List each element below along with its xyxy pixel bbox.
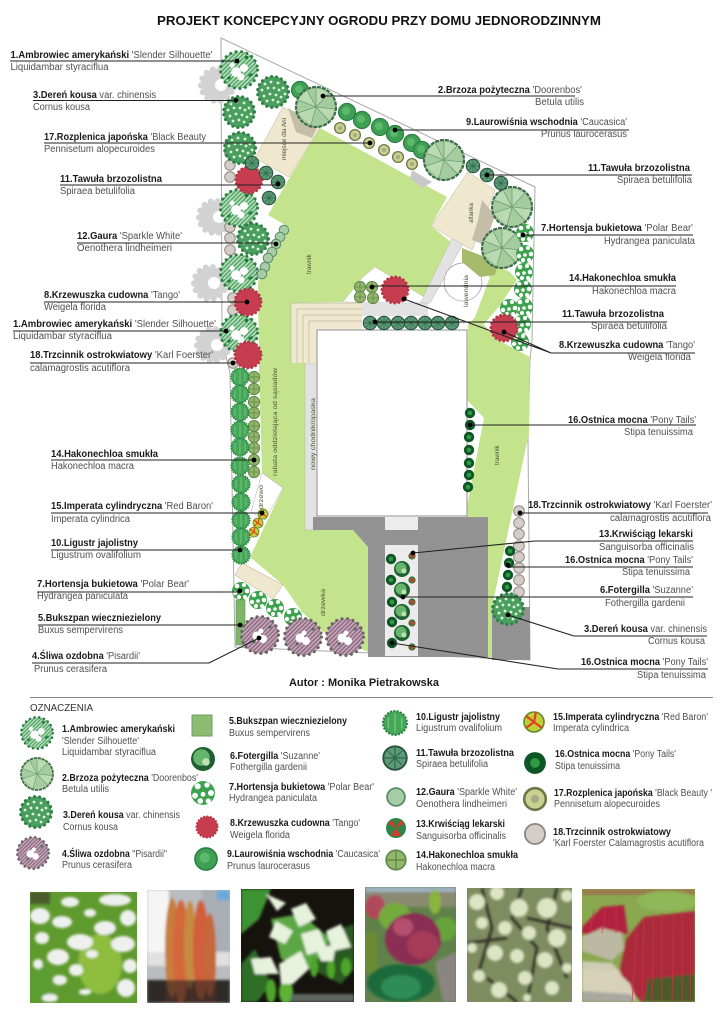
drive right segment	[492, 607, 530, 660]
plants: krzewuszka	[235, 167, 517, 368]
callout: 6 Fotergilla: 6.Fotergilla 'Suzanne'	[600, 585, 693, 596]
plot outline	[221, 38, 535, 660]
plants: imperata	[249, 509, 268, 537]
terrace	[291, 303, 362, 363]
callout: 7 Hortensja: Hydrangea paniculata	[37, 591, 128, 602]
callout: 10 Ligustr	[51, 538, 242, 561]
photo: white flowering viburnum	[30, 892, 137, 1003]
legend 14	[386, 850, 518, 873]
legend 1: 'Slender Silhouette'	[62, 736, 139, 747]
tree clearing	[251, 473, 283, 520]
legend 14: 14.Hakonechloa smukła	[416, 850, 518, 861]
plan annotations: miejsce dla Ani	[281, 118, 288, 160]
legend 5	[192, 715, 347, 739]
legend 6	[191, 747, 320, 773]
author: Autor : Monika Pietrakowska	[289, 677, 440, 689]
callout: 16 Ostnica	[390, 641, 708, 681]
legend 11: Spiraea betulifolia	[416, 759, 488, 770]
driveway	[313, 517, 488, 657]
legend 3: Cornus kousa	[63, 822, 118, 833]
callout: 1 Ambrowiec	[10, 50, 239, 73]
legend 8: Weigela florida	[230, 830, 290, 841]
right lawn	[465, 325, 530, 657]
callout: 8 Krzewuszka	[402, 297, 695, 363]
callout: 13 Krwisciag: Sanguisorba officinalis	[599, 542, 694, 553]
upper right lawn strip	[462, 248, 517, 325]
legend 1	[21, 717, 175, 758]
callout: 3 Deren: 3.Dereń kousa var. chinensis	[584, 624, 707, 635]
plan annotations: drzewka	[320, 588, 327, 616]
callout: 14 Hakonechloa: 14.Hakonechloa smukła	[51, 449, 158, 460]
legend 13: 13.Krwiściąg lekarski	[416, 819, 505, 830]
legend 17: Pennisetum alopecuroides	[554, 799, 660, 810]
legend 15: 15.Imperata cylindryczna 'Red Baron'	[553, 712, 708, 723]
callout: 2 Brzoza	[321, 85, 584, 108]
plan annotations: altanka	[468, 202, 475, 223]
pavilion miejsce dla Ani	[255, 107, 320, 177]
callout: 16 Ostnica	[506, 555, 693, 578]
callout: 6 Fotergilla	[401, 585, 693, 609]
legend 16: 16.Ostnica mocna 'Pony Tails'	[555, 749, 676, 760]
callout: 15 Imperata: 15.Imperata cylindryczna 'Red Baron'	[51, 501, 213, 512]
callout: 1 Ambrowiec second: 1.Ambrowiec amerykański 'Slender Silhouette'	[13, 319, 216, 330]
callout: 16 Ostnica: 16.Ostnica mocna 'Pony Tails'	[565, 555, 693, 566]
title: PROJEKT KONCEPCYJNY OGRODU PRZY DOMU JEDNORODZINNYM	[157, 13, 601, 28]
legend 6: Fothergilla gardenii	[230, 762, 307, 773]
legend 7	[191, 781, 374, 805]
plants: sliwa	[242, 616, 364, 656]
callout: 11 Tawula	[373, 309, 667, 332]
callout: 11 Tawula: Spiraea betulifolia	[591, 321, 667, 332]
plants: ambrowiec	[220, 52, 258, 352]
plants: hortensja	[232, 224, 534, 626]
legend 13: Sanguisorba officinalis	[416, 831, 506, 842]
legend 4: Prunus cerasifera	[62, 860, 132, 871]
plants: bukszpan	[236, 600, 245, 645]
legend 12: 12.Gaura 'Sparkle White'	[416, 787, 517, 798]
house	[317, 330, 467, 516]
legend 15	[524, 712, 708, 734]
plan annotations: nowy chodnik/opaska	[310, 397, 317, 470]
callout: 5 Bukszpan: 5.Bukszpan wieczniezielony	[38, 613, 161, 624]
callout: 14 Hakonechloa: 14.Hakonechloa smukła	[569, 273, 676, 284]
callout: 9 Laurowisnia	[393, 117, 629, 140]
callout: 1 Ambrowiec second: Liquidambar styraciflua	[13, 331, 112, 342]
plants: tawula	[245, 156, 508, 330]
callout: 4 Sliwa: Prunus cerasifera	[34, 664, 107, 675]
callout: 11 Tawula top: 11.Tawuła brzozolistna	[588, 163, 690, 174]
callouts: left column	[10, 50, 372, 675]
bench	[235, 563, 283, 599]
callout: 10 Ligustr: 10.Ligustr jajolistny	[51, 538, 138, 549]
callout: 17 Rozplenica: 17.Rozplenica japońska 'Black Beauty	[44, 132, 206, 143]
plants: gaura	[257, 225, 289, 279]
callout: 18 Trzcinnik	[518, 500, 712, 524]
legend 5: 5.Bukszpan wieczniezielony	[229, 716, 347, 727]
callout: 8 Krzewuszka: Weigela florida	[44, 302, 106, 313]
divider	[30, 696, 713, 698]
callout: 9 Laurowisnia: Prunus laurocerasus	[541, 129, 627, 140]
photo: tall orange columnar trees	[147, 890, 230, 1003]
callout: 16 Ostnica: Stipa tenuissima	[622, 567, 690, 578]
callout: 1 Ambrowiec: 1.Ambrowiec amerykański 'Slender Silhouette'	[10, 50, 213, 61]
plan annotations: drzewo	[258, 484, 265, 509]
plants: fotergilla	[394, 561, 410, 641]
legend 9: Prunus laurocerasus	[227, 861, 310, 872]
light rectangle	[385, 517, 418, 530]
plants: laurowisnia	[292, 82, 430, 158]
legend 15: Imperata cylindrica	[553, 723, 629, 734]
callout: 11 Tawula: 11.Tawuła brzozolistna	[60, 174, 162, 185]
legend 10	[383, 711, 502, 735]
callout: 12 Gaura: 12.Gaura 'Sparkle White'	[77, 231, 182, 242]
legend 18: 'Karl Foerster Calamagrostis acutiflora	[553, 838, 704, 849]
callout: 2 Brzoza: 2.Brzoza pożyteczna 'Doorenbos'	[438, 85, 582, 96]
planting bed under terrace	[343, 267, 424, 303]
callout: 3 Deren: Cornus kousa	[648, 636, 705, 647]
legend heading: OZNACZENIA	[30, 702, 93, 714]
plants: hakonechloa	[248, 281, 379, 478]
plants: trzcinnik	[225, 148, 524, 597]
callout: 9 Laurowisnia: 9.Laurowiśnia wschodnia 'Caucasica'	[466, 117, 627, 128]
callout: 16 Ostnica	[468, 415, 696, 438]
legend 2: Betula utilis	[62, 784, 109, 795]
callout: 15 Imperata	[51, 501, 264, 525]
callout: 14 Hakonechloa	[51, 449, 256, 472]
callout: 1 Ambrowiec: Liquidambar styraciflua	[10, 62, 109, 73]
plants: ostnica	[386, 408, 515, 648]
lawn circle	[444, 263, 482, 301]
callout: 12 Gaura	[77, 231, 278, 254]
callout: 11 Tawula top	[485, 163, 692, 186]
callout: 10 Ligustr: Ligustrum ovalifolium	[51, 550, 141, 561]
callout: 8 Krzewuszka: 8.Krzewuszka cudowna 'Tango'	[44, 290, 180, 301]
callout: 12 Gaura: Oenothera lindheimeri	[77, 243, 172, 254]
legend 10: 10.Ligustr jajolistny	[416, 712, 500, 723]
plan annotations	[258, 118, 501, 616]
plants: krwisciag	[408, 552, 416, 651]
callouts: right column	[321, 85, 712, 681]
callout: 6 Fotergilla: Fothergilla gardenii	[605, 598, 685, 609]
plan annotations: rabata oddzielająca od sąsiadów	[272, 367, 279, 476]
callout: 11 Tawula: Spiraea betulifolia	[60, 186, 135, 197]
legend 17: 17.Rozplenica japońska 'Black Beauty '	[554, 788, 712, 799]
callout: 16 Ostnica: Stipa tenuissima	[637, 670, 706, 681]
legend 18	[525, 824, 704, 849]
callout: 11 Tawula top: Spiraea betulifolia	[617, 175, 692, 186]
legend 9: 9.Laurowiśnia wschodnia 'Caucasica'	[227, 849, 380, 860]
callout: 4 Sliwa: 4.Śliwa ozdobna 'Pisardii'	[32, 649, 140, 662]
legend 5: Buxus sempervirens	[229, 728, 310, 739]
plan annotations: trawnik	[494, 444, 501, 465]
callout: 11 Tawula: 11.Tawuła brzozolistna	[562, 309, 664, 320]
panel: garden plan	[194, 38, 535, 660]
callout: 8 Krzewuszka: 8.Krzewuszka cudowna 'Tango'	[559, 340, 695, 351]
legend 2: 2.Brzoza pożyteczna 'Doorenbos'	[62, 773, 198, 784]
callout: 16 Ostnica: Stipa tenuissima	[624, 427, 693, 438]
legend 4	[17, 837, 167, 871]
legend 4: 4.Śliwa ozdobna "Pisardii"	[62, 847, 167, 860]
callout: 14 Hakonechloa	[370, 273, 676, 297]
photo: red baron grass with rocks	[582, 889, 695, 1002]
plants: rozplenica	[335, 123, 417, 169]
callout: 17 Rozplenica: Pennisetum alopecuroides	[44, 144, 155, 155]
paths	[305, 238, 464, 530]
legend 6: 6.Fotergilla 'Suzanne'	[230, 751, 320, 762]
callout: 3 Deren	[33, 90, 238, 113]
legend 11	[383, 746, 514, 770]
plants: ligustr	[231, 368, 250, 564]
callout: 7 Hortensja	[521, 223, 695, 247]
callout: 8 Krzewuszka	[44, 290, 249, 313]
pavilion altanka	[431, 172, 495, 250]
main lawn	[250, 128, 452, 652]
callout: 18 Trzcinnik	[30, 350, 235, 374]
legend 13	[386, 818, 506, 842]
plants: brzoza	[296, 87, 532, 268]
legend 1: 1.Ambrowiec amerykański	[62, 724, 175, 735]
callout: 18 Trzcinnik: 18.Trzcinnik ostrokwiatowy 'Karl Foerster'	[30, 350, 213, 361]
callout: 5 Bukszpan	[38, 613, 242, 636]
legend 11: 11.Tawuła brzozolistna	[416, 748, 514, 759]
legend 18: 18.Trzcinnik ostrokwiatowy	[553, 827, 671, 838]
legend 7: 7.Hortensja bukietowa 'Polar Bear'	[229, 782, 374, 793]
callout: 18 Trzcinnik: calamagrostis acutiflora	[30, 363, 130, 374]
callout: 17 Rozplenica	[44, 132, 372, 155]
photo: weigela shrub in garden	[365, 887, 456, 1002]
callout: 14 Hakonechloa: Hakonechloa macra	[592, 286, 676, 297]
callout: 1 Ambrowiec second	[13, 319, 228, 342]
legend 16: Stipa tenuissima	[555, 761, 620, 772]
callout: 2 Brzoza: Betula utilis	[535, 97, 584, 108]
planting bed in drive	[385, 545, 418, 656]
callout: 7 Hortensja: Hydrangea paniculata	[604, 236, 695, 247]
callout: 15 Imperata: Imperata cylindrica	[51, 514, 130, 525]
legend 7: Hydrangea paniculata	[229, 793, 317, 804]
panel: legend	[17, 711, 712, 873]
callout: 5 Bukszpan: Buxus sempervirens	[38, 625, 123, 636]
legend 10: Ligustrum ovalifolium	[416, 723, 502, 734]
callout: 3 Deren: 3.Dereń kousa var. chinensis	[33, 90, 156, 101]
photo: white dogwood flowers	[241, 889, 354, 1002]
legend 3	[20, 796, 180, 833]
plants: deren	[224, 76, 524, 624]
callout: 7 Hortensja: 7.Hortensja bukietowa 'Polar Bear'	[37, 579, 189, 590]
legend 1: Liquidambar styraciflua	[62, 747, 156, 758]
callout: 14 Hakonechloa: Hakonechloa macra	[51, 461, 134, 472]
legend 8	[197, 817, 360, 841]
callout: 3 Deren	[506, 613, 707, 647]
photo: fothergilla blossoms	[467, 888, 572, 1002]
legend 16	[524, 749, 676, 774]
callout: 13 Krwisciag: 13.Krwiściąg lekarski	[599, 529, 693, 540]
panel: plant photos	[30, 886, 697, 1004]
legend 12: Oenothera lindheimeri	[416, 799, 507, 810]
legend 2	[21, 758, 198, 795]
callout: 16 Ostnica: 16.Ostnica mocna 'Pony Tails'	[581, 657, 708, 668]
legend 12	[387, 787, 517, 810]
callout: 18 Trzcinnik: 18.Trzcinnik ostrokwiatowy 'Karl Foerster'	[528, 500, 712, 511]
callout: 18 Trzcinnik: calamagrostis acutiflora	[610, 513, 711, 524]
callout: 4 Sliwa	[32, 636, 261, 675]
legend 8: 8.Krzewuszka cudowna 'Tango'	[230, 818, 360, 829]
callout: 16 Ostnica: 16.Ostnica mocna 'Pony Tails'	[568, 415, 696, 426]
legend 17	[524, 788, 712, 810]
callout: 13 Krwisciag	[411, 529, 694, 555]
callout: 11 Tawula	[60, 174, 280, 197]
legend 3: 3.Dereń kousa var. chinensis	[63, 810, 180, 821]
callout: 7 Hortensja: 7.Hortensja bukietowa 'Polar Bear'	[541, 223, 693, 234]
callout: 7 Hortensja	[37, 579, 242, 602]
callout: 8 Krzewuszka: Weigela florida	[628, 352, 691, 363]
plan annotations: lawendnia	[463, 274, 470, 307]
legend 14: Hakonechloa macra	[416, 862, 495, 873]
plan annotations: trawnik	[306, 253, 313, 274]
shadows	[194, 69, 498, 361]
callout: 3 Deren: Cornus kousa	[33, 102, 90, 113]
legend 9	[195, 848, 380, 872]
